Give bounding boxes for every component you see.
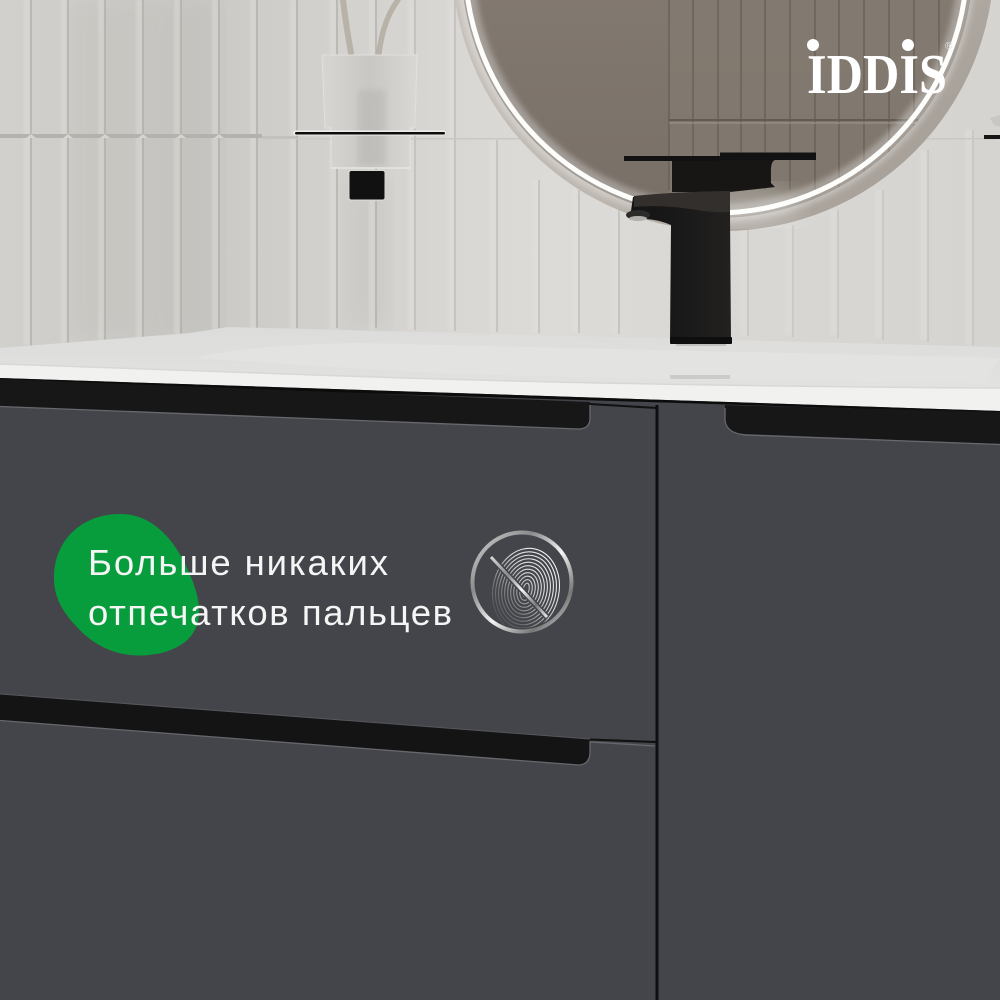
caption text: отпечатков пальцев bbox=[88, 592, 452, 633]
vertical gap between drawers and door bbox=[656, 405, 658, 1000]
caption text: Больше никаких bbox=[88, 542, 388, 583]
registered mark: ® bbox=[945, 41, 953, 52]
glass shelf bbox=[293, 130, 446, 136]
round mirror bbox=[452, 0, 994, 240]
lower drawer gap and handle bbox=[0, 694, 590, 765]
lever plate bbox=[624, 152, 816, 161]
faucet bbox=[624, 152, 816, 346]
logo: IDDIS bbox=[807, 44, 947, 106]
tile joints bbox=[31, 0, 973, 347]
shadow under counter bbox=[0, 378, 1000, 413]
logo dots bbox=[807, 39, 914, 51]
countertop bbox=[0, 327, 1000, 412]
caption text bbox=[88, 542, 452, 633]
tiled wall bbox=[0, 0, 1000, 360]
basin bbox=[195, 343, 1000, 383]
spout and body bbox=[630, 192, 731, 342]
glass holder bbox=[293, 55, 446, 201]
toothbrushes bbox=[343, 0, 398, 53]
mirror reflection of tiles bbox=[668, 0, 940, 190]
LED light glow bbox=[465, 0, 967, 213]
wall mount bbox=[348, 170, 386, 201]
green blob bbox=[54, 514, 199, 656]
faucet base bbox=[670, 337, 732, 344]
icon: crossed-out fingerprint bbox=[472, 532, 572, 638]
horizontal tile joint bbox=[0, 134, 996, 140]
upper body bbox=[672, 160, 775, 192]
small shelf at right edge bbox=[984, 115, 1000, 139]
bevel highlights bbox=[24, 0, 972, 345]
aerator bbox=[626, 210, 650, 220]
cabinet bbox=[0, 378, 1000, 1000]
top drawer handle recess bbox=[0, 379, 590, 429]
front edge bbox=[0, 364, 1000, 411]
door handle recess bbox=[725, 405, 1000, 444]
LED light ring bbox=[465, 0, 967, 213]
